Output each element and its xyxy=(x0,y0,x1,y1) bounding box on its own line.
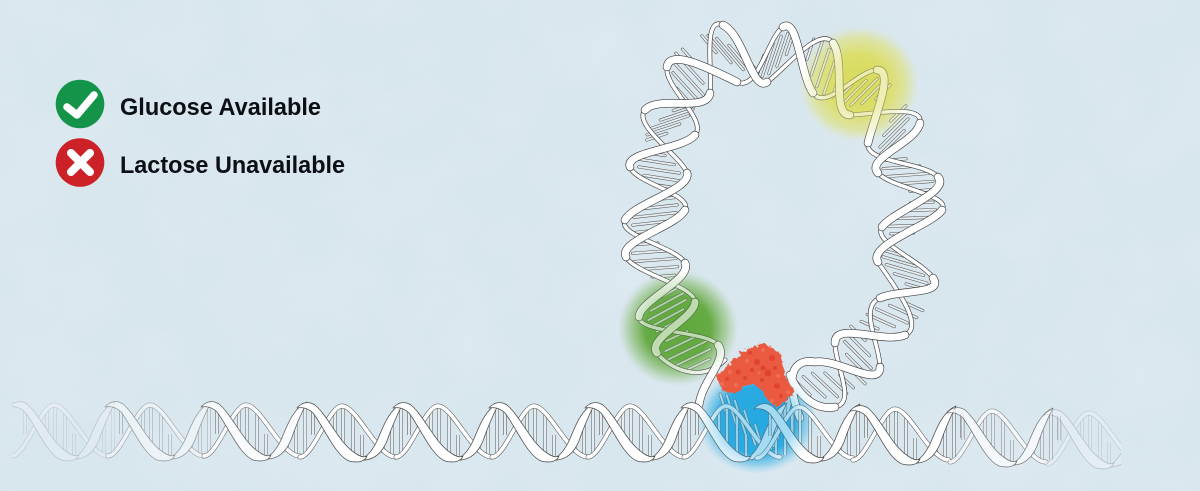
base pairs of the loop xyxy=(626,26,943,458)
front ribbon segments xyxy=(625,25,942,418)
protein: RNA polymerase xyxy=(716,343,795,407)
glow: blue region xyxy=(697,366,817,474)
icon: green check xyxy=(56,80,104,128)
icon: red cross xyxy=(56,138,104,187)
colour tint: green over DNA xyxy=(618,270,738,386)
glow: yellow region xyxy=(799,26,919,142)
back ribbon segments xyxy=(624,24,943,407)
label: Lactose Unavailable: Lactose Unavailable xyxy=(120,152,345,179)
colour tint: blue over DNA xyxy=(697,366,817,474)
DNA strand along the bottom xyxy=(9,402,1156,469)
label: Glucose Available: Glucose Available xyxy=(120,94,321,121)
DNA loop xyxy=(624,24,943,458)
glow: green region xyxy=(618,270,738,386)
legend xyxy=(56,80,345,187)
colour tint: yellow over DNA xyxy=(799,26,919,142)
